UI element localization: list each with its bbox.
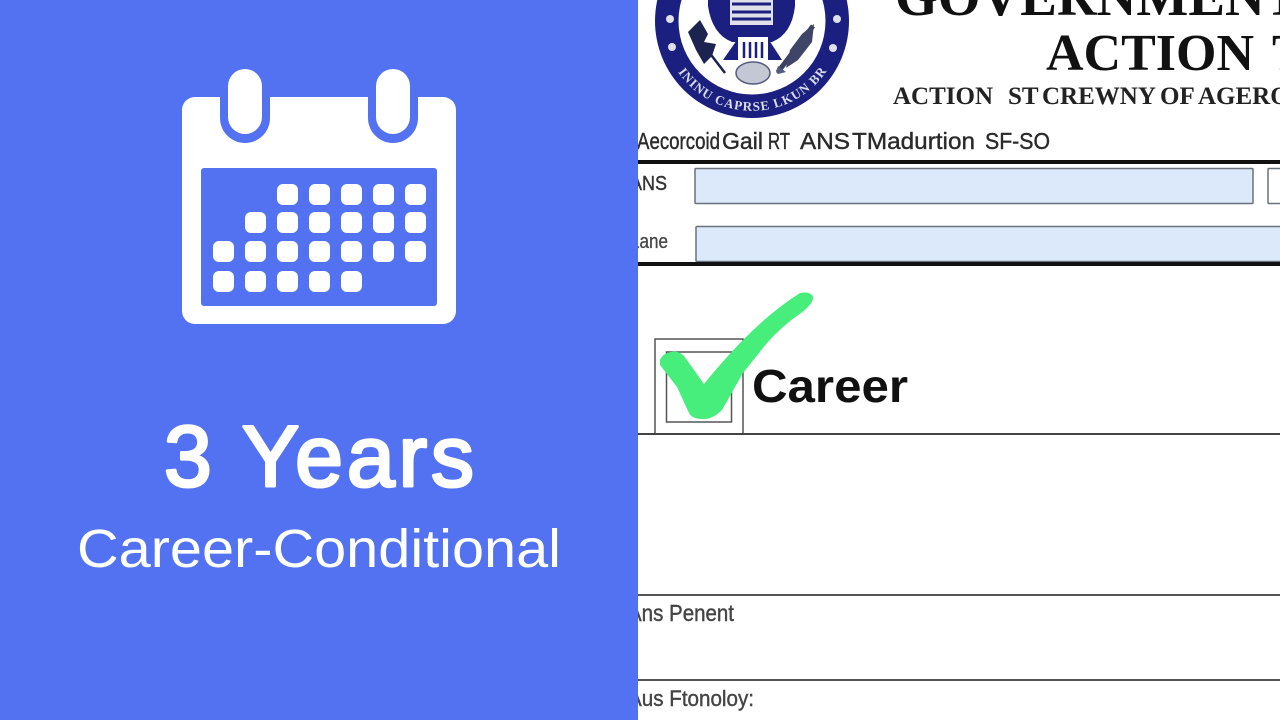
bottom label: Aus Ftonoloy:	[628, 686, 754, 711]
icon: calendar	[182, 69, 456, 324]
form rule lower	[638, 433, 1280, 435]
field label two: Lane	[630, 231, 668, 253]
small input box	[1268, 168, 1280, 204]
form reference line: TMadurtion	[852, 128, 975, 154]
form reference line	[637, 128, 1050, 154]
form rule bottom	[638, 679, 1280, 681]
form subtitle: ST	[1008, 83, 1039, 110]
form reference line: RT	[768, 128, 790, 154]
form rule top	[638, 160, 1280, 164]
heading: 3 Years: 3 Years	[164, 409, 474, 505]
panel: blue left	[0, 0, 638, 720]
field label one: ANS	[630, 173, 667, 195]
icon: government seal	[655, 0, 849, 118]
form reference line: Gail	[722, 128, 763, 154]
checkbox outer	[655, 339, 743, 434]
seal ring text	[678, 67, 827, 111]
form subtitle: ACTION	[893, 83, 993, 110]
subheading: Career-Conditional: Career-Conditional	[77, 519, 561, 579]
form reference line: Aecorcoid	[637, 128, 720, 154]
form reference line: SF-SO	[985, 128, 1050, 154]
icon: green check mark	[660, 292, 813, 419]
form subtitle: CREWNY	[1042, 83, 1156, 110]
checkbox inner	[666, 352, 732, 422]
career label: Career	[752, 360, 908, 412]
form title: action: ACTION	[1046, 25, 1254, 82]
section label: Ans Penent	[628, 600, 735, 626]
form rule middle	[638, 262, 1280, 266]
input field one	[695, 168, 1253, 204]
form subtitle: OF	[1160, 83, 1195, 110]
input field two	[696, 226, 1280, 262]
form reference line: ANS	[800, 128, 850, 154]
form rule section	[638, 594, 1280, 596]
calendar day grid	[213, 184, 426, 292]
